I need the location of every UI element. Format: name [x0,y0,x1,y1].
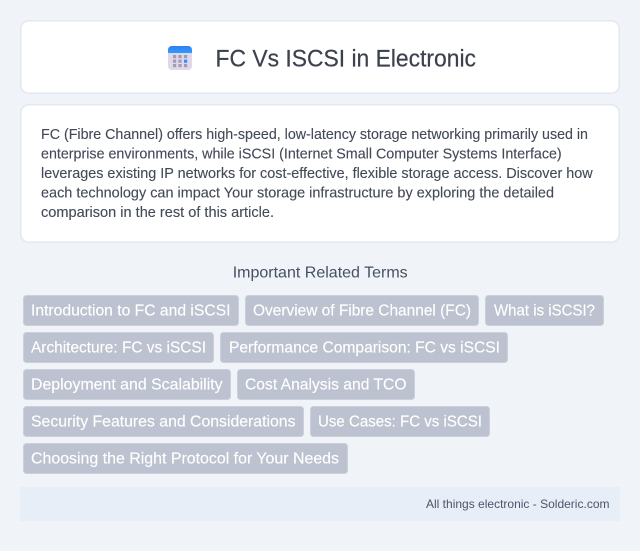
icon: calendar [168,46,192,70]
text block: intro: comparison in the rest of this article. [41,205,274,221]
text block: intro: each technology can impact Your storage infrastructure by exploring the detailed [41,185,554,201]
chip: security [24,406,304,436]
chip: introduction: Introduction to FC and iSCSI [31,303,230,320]
chip: use cases [310,406,490,436]
panel: term chips [24,296,604,474]
chip: choosing [24,444,348,474]
chip: performance [220,332,508,362]
panel: title card [21,21,619,93]
chip: architecture [24,332,214,362]
chip: what is iSCSI [486,296,604,326]
chip: introduction [24,296,238,326]
chip: deployment: Deployment and Scalability [31,377,223,394]
chip: what is iSCSI: What is iSCSI? [494,303,595,320]
chip: performance: Performance Comparison: FC vs iSCSI [229,340,500,357]
chip: security: Security Features and Considerations [31,414,296,431]
chip: use cases: Use Cases: FC vs iSCSI [318,414,482,431]
chip: overview: Overview of Fibre Channel (FC) [253,303,471,320]
chip: overview [246,296,478,326]
chip: cost: Cost Analysis and TCO [245,377,406,394]
panel: intro paragraph [21,105,619,242]
text block: intro: leverages existing IP networks for cost-effective, flexible storage access. Discover how [41,166,593,182]
chip: architecture: Architecture: FC vs iSCSI [31,340,206,357]
chip: choosing: Choosing the Right Protocol for Your Needs [31,451,339,468]
chip: deployment [24,370,230,400]
text block: intro [41,127,593,221]
text block: intro: enterprise environments, while iSCSI (Internet Small Computer Systems Interface) [41,146,562,162]
title: FC Vs ISCSI in Electronic [216,46,476,73]
footer: All things electronic - Solderic.com [426,497,610,511]
footer [20,487,620,521]
chip: cost [238,370,414,400]
text block: intro: FC (Fibre Channel) offers high-speed, low-latency storage networking primarily used in [41,127,588,143]
heading: related terms: Important Related Terms [233,265,408,282]
